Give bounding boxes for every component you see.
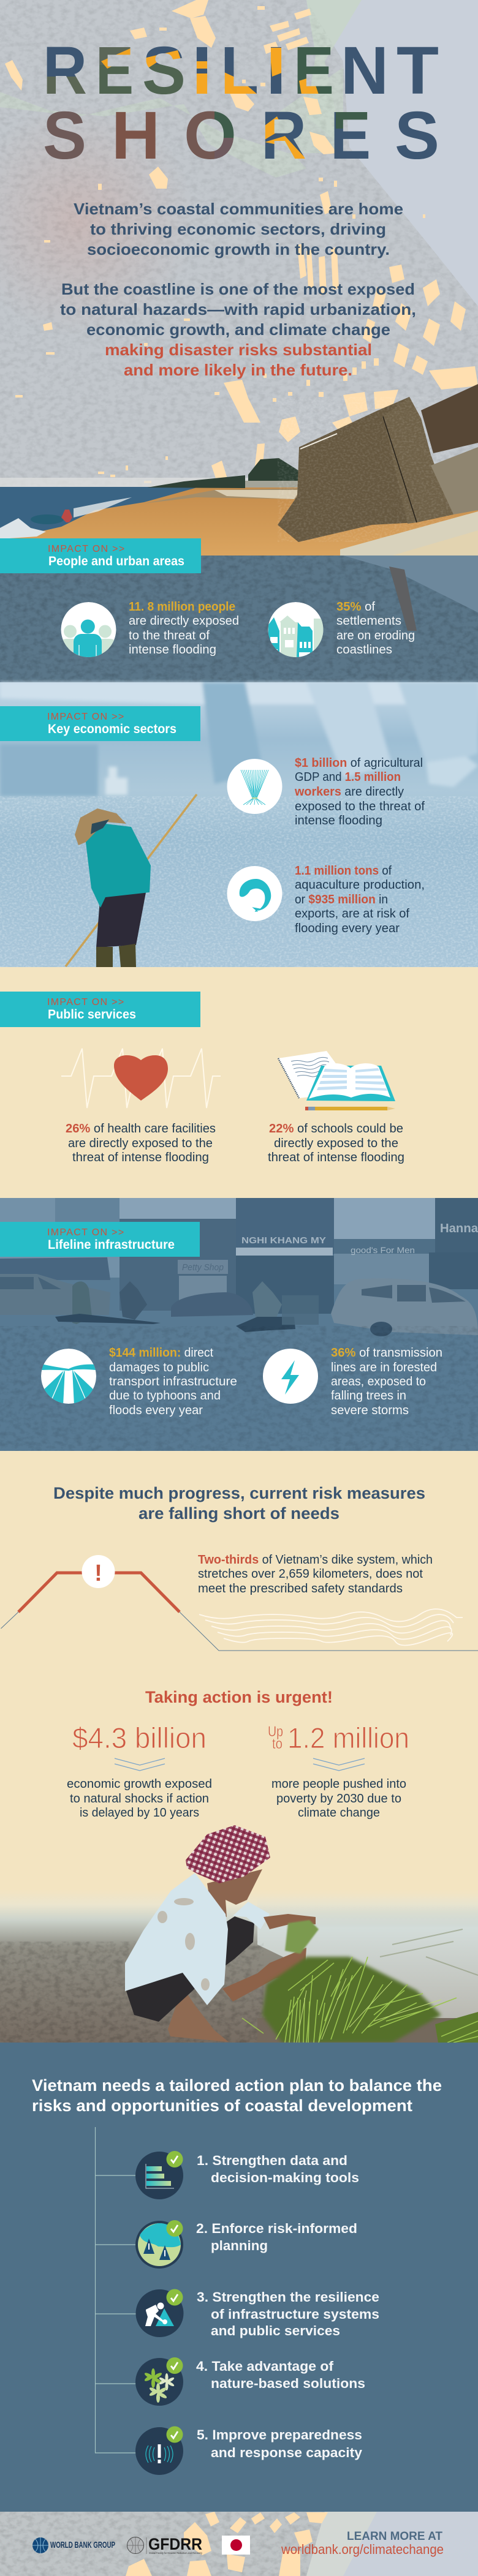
icon: road xyxy=(40,1349,97,1406)
stat: people pushed into poverty: more people pushed into xyxy=(271,1777,406,1791)
stat: 35 percent of settlements: coastlines xyxy=(336,643,392,657)
intro text: to natural hazards—with rapid urbanization, xyxy=(60,300,416,318)
stat: transport damages: transport infrastructure xyxy=(109,1375,237,1388)
dike diagram: ! xyxy=(94,1561,102,1586)
farmer with pole xyxy=(66,794,197,967)
title: L xyxy=(221,33,259,108)
learn more link: worldbank.org/climatechange xyxy=(281,2542,444,2557)
stat: aquaculture: exports, are at risk of xyxy=(295,907,409,921)
heading: risk measures xyxy=(53,1484,425,1523)
title: E xyxy=(96,33,134,108)
stat: transport damages xyxy=(109,1346,237,1417)
icon: buildings xyxy=(268,602,324,657)
stat: agricultural GDP xyxy=(294,756,425,827)
flooded street photo xyxy=(0,1198,478,1451)
item 1: data and decision-making tools: 1. Strengthen data and xyxy=(197,2153,347,2168)
item 3: resilience of infrastructure: and public services xyxy=(211,2323,340,2338)
stat: health care facilities: 26% of health care facilities xyxy=(66,1122,216,1135)
section header: lifeline infrastructure: IMPACT ON >> xyxy=(47,1227,125,1238)
text: dike system xyxy=(198,1553,433,1595)
heading: taking action is urgent: Taking action is urgent! xyxy=(145,1688,333,1706)
item 4: nature-based solutions: nature-based solutions xyxy=(211,2376,365,2391)
item 3: resilience of infrastructure: of infrastructure systems xyxy=(211,2307,379,2322)
intro text: and more likely in the future. xyxy=(124,361,352,379)
stat: transmission lines: severe storms xyxy=(331,1404,409,1417)
item 3: resilience of infrastructure: 3. Strengthen the resilience xyxy=(197,2289,379,2305)
stat: people pushed into poverty: poverty by 2030 due to xyxy=(276,1792,401,1806)
intro text: economic growth, and climate change xyxy=(86,320,390,339)
title: O xyxy=(184,98,237,173)
logo: GFDRR: Global Facility for Disaster Reduction and Recovery xyxy=(149,2552,203,2555)
stat: 35 percent of settlements xyxy=(336,600,415,657)
stat: people pushed into poverty: Up xyxy=(268,1723,283,1740)
stat: economic growth exposed xyxy=(67,1722,212,1820)
stat: 11.8 million people: 11. 8 million people xyxy=(129,600,235,614)
stat: transmission lines: lines are in forested xyxy=(331,1361,437,1374)
learn more link xyxy=(281,2530,444,2557)
stat: agricultural GDP: $1 billion of agricultural xyxy=(295,756,423,770)
stat: economic growth exposed: to natural shocks if action xyxy=(70,1792,209,1806)
stat: transport damages: $144 million: direct xyxy=(109,1346,213,1360)
stat: transmission lines: falling trees in xyxy=(331,1389,406,1403)
logo: GFDRR: GFDRR xyxy=(148,2535,202,2553)
background: satellite map xyxy=(0,0,478,490)
stat: economic growth exposed: economic growth exposed xyxy=(67,1777,212,1791)
stat: aquaculture xyxy=(295,864,425,935)
footer map: flood zones xyxy=(126,2512,328,2576)
heading: action plan: risks and opportunities of coastal development xyxy=(32,2096,412,2115)
photo signage: NGHI KHANG MY xyxy=(241,1235,326,1246)
item 4: nature-based solutions xyxy=(135,2357,365,2406)
section header: key economic sectors: Key economic sectors xyxy=(48,722,176,736)
stat: agricultural GDP: exposed to the threat of xyxy=(295,800,425,813)
item 2: risk-informed planning xyxy=(135,2220,357,2269)
icon: lightning bolt xyxy=(263,1349,318,1404)
map: flood-exposed zones xyxy=(5,0,478,484)
intro text xyxy=(60,200,416,379)
title: S xyxy=(43,98,86,173)
stat: people pushed into poverty xyxy=(268,1722,409,1820)
panel: lifeline infrastructure xyxy=(0,1198,478,1451)
icon: shrimp xyxy=(227,866,282,921)
section header: people and urban areas: IMPACT ON >> xyxy=(48,544,126,554)
title: T xyxy=(396,33,439,108)
rice seedlings xyxy=(242,1920,478,2043)
stat: 35 percent of settlements: settlements xyxy=(336,614,401,628)
stat: health care facilities: threat of intense flooding xyxy=(72,1151,209,1164)
logo: World Bank Group: WORLD BANK GROUP xyxy=(50,2540,115,2550)
photo: farmer planting rice xyxy=(0,1825,478,2043)
stat: aquaculture: aquaculture production, xyxy=(295,878,425,892)
title: I xyxy=(266,33,286,108)
title: S xyxy=(142,33,186,108)
beach photo xyxy=(0,384,478,555)
stat: people pushed into poverty: to xyxy=(272,1736,283,1752)
stat: aquaculture: 1.1 million tons of xyxy=(295,864,392,878)
stat: transport damages: floods every year xyxy=(109,1404,203,1417)
heading: risk measures: Despite much progress, current risk measures xyxy=(53,1484,425,1502)
title: H xyxy=(112,98,160,173)
heading: action plan xyxy=(32,2076,442,2115)
panel: action plan xyxy=(0,2043,478,2512)
stat: agricultural GDP: intense flooding xyxy=(295,814,382,827)
stat: health care facilities: are directly exposed to the xyxy=(68,1137,213,1150)
stat: 35 percent of settlements: 35% of xyxy=(336,600,375,614)
title: N xyxy=(341,33,389,108)
title xyxy=(43,33,439,173)
title: R xyxy=(43,33,87,108)
footer xyxy=(0,2512,478,2576)
learn more link: LEARN MORE AT xyxy=(347,2530,444,2543)
panel: public services xyxy=(0,967,478,1198)
photo signage: Petty Shop xyxy=(182,1262,224,1273)
intro text: to thriving economic sectors, driving xyxy=(90,220,386,238)
stat: 35 percent of settlements: are on eroding xyxy=(336,629,415,642)
photo signage: Hanna xyxy=(440,1222,478,1235)
title: E xyxy=(294,33,334,108)
title: I xyxy=(192,33,212,108)
item 5: preparedness and response xyxy=(135,2427,363,2475)
title: S xyxy=(395,98,439,173)
intro text: making disaster risks substantial xyxy=(105,341,372,359)
stat: 11.8 million people: to the threat of xyxy=(129,629,210,642)
section header: public services: IMPACT ON >> xyxy=(47,997,125,1007)
section header: lifeline infrastructure: Lifeline infrastructure xyxy=(48,1238,175,1252)
photo signage: good's For Men xyxy=(351,1245,415,1255)
intro text: Vietnam’s coastal communities are home xyxy=(74,200,403,218)
stat: people pushed into poverty: 1.2 million xyxy=(287,1722,409,1754)
logo: GFDRR xyxy=(127,2535,203,2555)
section header: key economic sectors xyxy=(0,706,200,741)
section header: people and urban areas: People and urban areas xyxy=(48,554,184,568)
icon: heartbeat xyxy=(61,1049,221,1108)
stat: economic growth exposed: $4.3 billion xyxy=(72,1722,207,1754)
logo: Japan flag xyxy=(222,2536,250,2555)
stat: 11.8 million people: intense flooding xyxy=(129,643,216,657)
stat: transmission lines xyxy=(331,1346,442,1417)
section header: public services xyxy=(0,992,200,1027)
title: R xyxy=(261,98,306,173)
photo signage xyxy=(182,1222,478,1273)
intro text: socioeconomic growth in the country. xyxy=(87,240,390,258)
text: dike system: Two-thirds of Vietnam’s dike system, which xyxy=(198,1553,433,1567)
stat: health care facilities xyxy=(66,1122,216,1164)
stat: agricultural GDP: GDP and 1.5 million xyxy=(295,770,401,784)
item 5: preparedness and response: 5. Improve preparedness xyxy=(197,2427,362,2442)
stat: schools: 22% of schools could be xyxy=(269,1122,403,1135)
logo: World Bank Group xyxy=(32,2537,115,2553)
stat: people pushed into poverty: climate change xyxy=(298,1806,380,1820)
text: dike system: meet the prescribed safety standards xyxy=(198,1582,403,1595)
farmer figure xyxy=(125,1825,316,2042)
section header: key economic sectors: IMPACT ON >> xyxy=(47,712,125,722)
item 1: data and decision-making tools xyxy=(135,2151,359,2199)
item 2: risk-informed planning: planning xyxy=(211,2238,268,2253)
stat: 11.8 million people xyxy=(129,600,239,657)
intro text: But the coastline is one of the most exposed xyxy=(61,280,415,298)
heading: action plan: Vietnam needs a tailored action plan to balance the xyxy=(32,2076,442,2095)
icon: books and pencil xyxy=(278,1051,395,1110)
item 1: data and decision-making tools: decision-making tools xyxy=(211,2170,359,2185)
icon: rice bundle xyxy=(227,759,282,814)
stat: schools xyxy=(268,1122,404,1164)
stat: 11.8 million people: are directly exposed xyxy=(129,614,239,628)
stat: aquaculture: or $935 million in xyxy=(295,893,388,906)
stat: schools: threat of intense flooding xyxy=(268,1151,404,1164)
stat: transmission lines: areas, exposed to xyxy=(331,1375,426,1388)
panel: key economic sectors xyxy=(0,682,478,967)
connector lines xyxy=(96,2127,136,2453)
text: dike system: stretches over 2,659 kilometers, does not xyxy=(198,1567,423,1581)
stat: aquaculture: flooding every year xyxy=(295,922,400,935)
item 2: risk-informed planning: 2. Enforce risk-informed xyxy=(196,2221,357,2236)
icon: people xyxy=(60,602,116,661)
section header: lifeline infrastructure xyxy=(0,1222,200,1257)
item 3: resilience of infrastructure xyxy=(136,2289,379,2338)
stat: economic growth exposed: is delayed by 10 years xyxy=(80,1806,199,1820)
item 5: preparedness and response: and response capacity xyxy=(211,2445,363,2460)
panel: risk measures xyxy=(0,1451,478,1892)
stat: transport damages: damages to public xyxy=(109,1361,209,1374)
panel: people and urban areas xyxy=(0,538,478,682)
stat: transport damages: due to typhoons and xyxy=(109,1389,221,1403)
stat: schools: directly exposed to the xyxy=(274,1137,398,1150)
item 4: nature-based solutions: 4. Take advantage of xyxy=(196,2359,334,2374)
title: E xyxy=(330,98,371,173)
section header: people and urban areas xyxy=(0,538,201,573)
heading: risk measures: are falling short of needs xyxy=(138,1504,340,1523)
stat: agricultural GDP: workers are directly xyxy=(294,785,404,799)
stat: transmission lines: 36% of transmission xyxy=(331,1346,442,1360)
dike diagram xyxy=(1,1555,478,1651)
section header: public services: Public services xyxy=(48,1007,136,1022)
